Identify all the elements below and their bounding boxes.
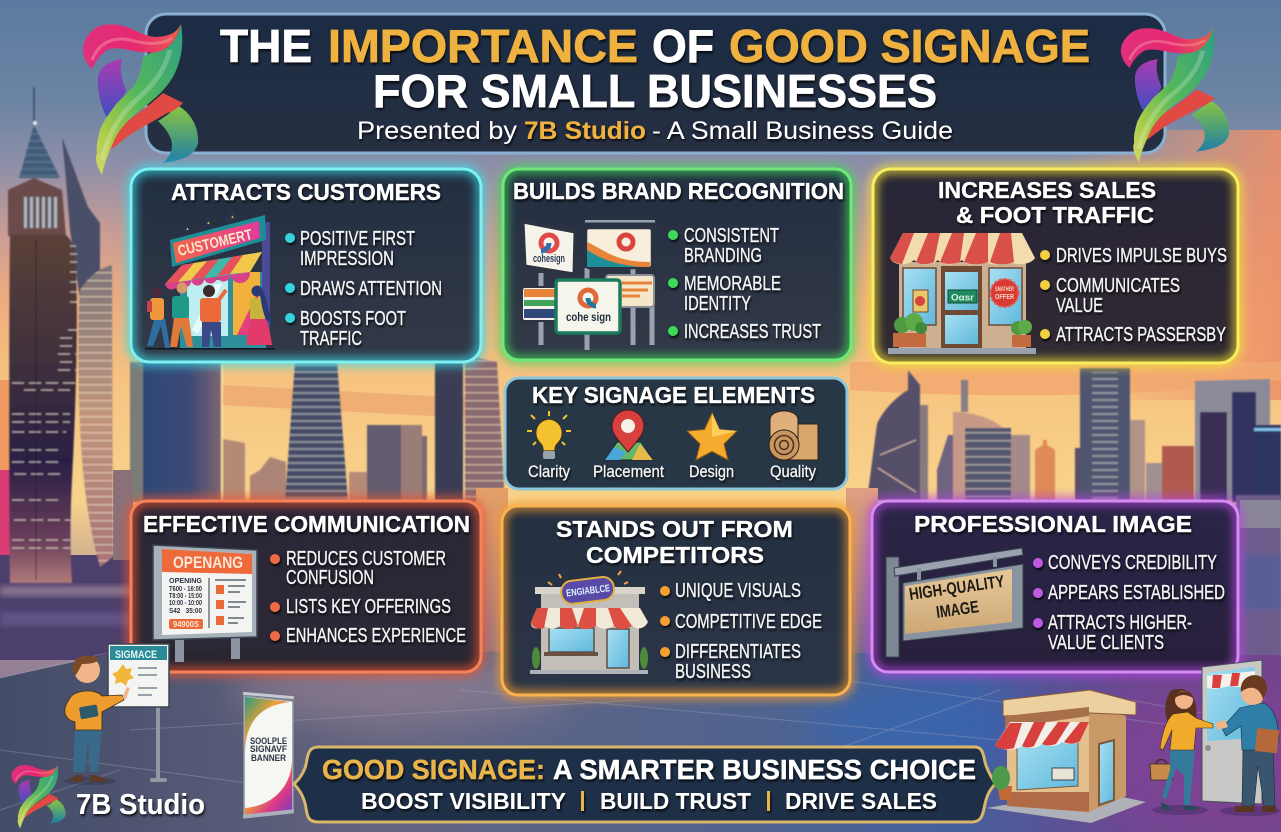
logo wordmark: 7B Studio xyxy=(76,789,205,821)
bullets: DRIVES IMPULSE BUYS xyxy=(1056,245,1227,267)
banner text: BANNER xyxy=(251,753,286,763)
heading: STANDS OUT FROM xyxy=(556,516,793,542)
bullets: IDENTITY xyxy=(684,293,751,315)
shopper 2 xyxy=(170,282,193,347)
sign text: T8:00 - 15:00 xyxy=(169,593,202,600)
bullets: IMPRESSION xyxy=(300,248,394,270)
sign text: SIGMACE xyxy=(115,649,157,661)
banner text xyxy=(250,736,287,763)
illustration: man presenting sign xyxy=(64,644,169,785)
title: IMPORTANCE xyxy=(328,20,638,72)
bullets: CONSISTENT xyxy=(684,225,779,247)
title: THE xyxy=(220,20,312,72)
sign text: HIGH-QUALITY xyxy=(908,572,1006,604)
callout heading: GOOD SIGNAGE: xyxy=(322,754,545,785)
icon: light bulb xyxy=(527,411,571,459)
bullets: ATTRACTS PASSERSBY xyxy=(1056,324,1226,346)
bullets xyxy=(1033,552,1225,654)
heading: ATTRACTS CUSTOMERS xyxy=(171,179,441,205)
shopper 1 xyxy=(147,287,170,348)
callout subline: BUILD TRUST xyxy=(600,788,751,814)
heading xyxy=(938,177,1156,228)
bullets: LISTS KEY OFFERINGS xyxy=(286,596,451,618)
header panel xyxy=(146,14,1165,153)
lower-left haze xyxy=(0,555,135,660)
icon labels: Clarity xyxy=(528,462,570,481)
lower-right haze xyxy=(1236,495,1281,660)
subtitle xyxy=(357,117,953,145)
bullets: CONFUSION xyxy=(286,567,374,589)
bullets: CONVEYS CREDIBILITY xyxy=(1048,552,1217,574)
title: FOR SMALL BUSINESSES xyxy=(373,65,937,117)
sign text: cohesign xyxy=(533,253,565,265)
bullets: APPEARS ESTABLISHED xyxy=(1048,582,1225,604)
woman xyxy=(1150,689,1213,810)
bullets xyxy=(660,580,822,683)
illustration: shop front xyxy=(888,233,1036,354)
right-mid skyline xyxy=(867,370,920,500)
sign text: OPENING xyxy=(169,578,203,585)
illustration: small shop building xyxy=(987,690,1146,823)
panel: attracts customers xyxy=(131,169,481,362)
bullets: MEMORABLE xyxy=(684,273,781,295)
panel: effective communication xyxy=(131,501,481,672)
icon labels: Placement xyxy=(593,462,664,481)
illustration: roll-up banner xyxy=(243,692,294,819)
callout: good signage banner xyxy=(294,747,995,822)
subtitle: 7B Studio xyxy=(524,117,646,145)
title: GOOD SIGNAGE xyxy=(729,20,1090,72)
panel: professional image xyxy=(872,501,1238,672)
bullets: VALUE CLIENTS xyxy=(1048,632,1164,654)
bullets: DRAWS ATTENTION xyxy=(300,278,442,300)
panel: builds brand recognition xyxy=(503,169,851,360)
bullets: REDUCES CUSTOMER xyxy=(286,548,446,570)
bullets: BRANDING xyxy=(684,245,762,267)
bullets: POSITIVE FIRST xyxy=(300,228,415,250)
icon: 7B logo left xyxy=(83,24,198,175)
callout subline: DRIVE SALES xyxy=(785,788,937,814)
shopper 3 xyxy=(200,285,226,347)
sign text: 10:00 - 10:00 xyxy=(169,600,202,607)
illustration: storefront with shoppers xyxy=(145,212,275,350)
illustration: standout shop xyxy=(530,571,648,674)
sign text: Oαsr xyxy=(951,292,974,304)
sign text: ENGIABLCE xyxy=(566,583,611,600)
man xyxy=(1215,675,1279,812)
title xyxy=(220,20,1090,117)
shopper 4 xyxy=(247,286,272,345)
sign text: 94900S xyxy=(173,620,200,629)
icon labels: Quality xyxy=(770,462,816,481)
bullets: DIFFERENTIATES xyxy=(675,641,801,663)
bullets: INCREASES TRUST xyxy=(684,321,821,343)
icon labels: Design xyxy=(689,462,734,481)
illustration: branded signs xyxy=(522,220,655,350)
logo: 7B Studio xyxy=(11,765,205,828)
bullets: BOOSTS FOOT xyxy=(300,308,406,330)
callout heading xyxy=(322,754,976,785)
illustration: information board xyxy=(153,545,257,662)
sign text: CUSTOMERT xyxy=(176,226,254,260)
callout subline: BOOST VISIBILITY xyxy=(361,788,566,814)
icon: map pin xyxy=(605,410,653,460)
sign text: IMAGE xyxy=(935,597,980,622)
heading: COMPETITORS xyxy=(586,542,764,568)
bullets: COMPETITIVE EDGE xyxy=(675,611,822,633)
heading: BUILDS BRAND RECOGNITION xyxy=(513,178,844,204)
subtitle: Presented by xyxy=(357,117,518,145)
bullets: ATTRACTS HIGHER- xyxy=(1048,612,1192,634)
bullets: COMMUNICATES xyxy=(1056,275,1180,297)
bullets xyxy=(285,228,442,350)
callout heading: A SMARTER BUSINESS CHOICE xyxy=(553,754,976,785)
bullets: VALUE xyxy=(1056,295,1103,317)
icon: star xyxy=(687,413,737,460)
bullets xyxy=(1040,245,1227,346)
bullets: ENHANCES EXPERIENCE xyxy=(286,625,466,647)
panel: key signage elements xyxy=(505,378,847,489)
sign text: OPENANG xyxy=(173,553,243,572)
subtitle: - A Small Business Guide xyxy=(652,117,953,145)
panel: stands out from competitors xyxy=(502,506,850,695)
sign text xyxy=(908,572,1006,622)
gaps between lower cards xyxy=(476,488,508,713)
heading: PROFESSIONAL IMAGE xyxy=(914,511,1192,537)
icon labels xyxy=(528,462,816,481)
banner text: SOOLPLE xyxy=(250,736,287,746)
heading: KEY SIGNAGE ELEMENTS xyxy=(532,382,815,408)
heading: & FOOT TRAFFIC xyxy=(956,202,1154,228)
bullets: BUSINESS xyxy=(675,661,751,683)
door xyxy=(1202,660,1262,804)
bullets: UNIQUE VISUALS xyxy=(675,580,801,602)
title: OF xyxy=(652,20,714,72)
bullets xyxy=(270,548,466,647)
sign text: S42 35:00 xyxy=(169,608,202,615)
callout subline xyxy=(361,788,937,814)
illustration: hanging wooden sign xyxy=(886,548,1023,657)
bullets xyxy=(668,225,821,343)
heading: INCREASES SALES xyxy=(938,177,1156,203)
icon: 7B logo right xyxy=(1121,28,1229,162)
bullets: TRAFFIC xyxy=(300,328,362,350)
left towers xyxy=(8,87,113,583)
panel: increases sales and foot traffic xyxy=(873,169,1238,363)
sign text: SMATHER xyxy=(995,286,1014,293)
banner text: SIGNAVF xyxy=(250,744,287,754)
heading: EFFECTIVE COMMUNICATION xyxy=(143,511,470,537)
sign text: T600 - 16:00 xyxy=(169,586,202,593)
sign text xyxy=(169,578,203,615)
sign text: cohe sign xyxy=(566,312,611,324)
icon: material roll xyxy=(769,411,818,460)
illustration: shopkeeper greeting customer xyxy=(1150,660,1280,816)
heading xyxy=(556,516,793,568)
floor xyxy=(0,650,1281,832)
sign text: OFFER xyxy=(995,294,1014,301)
left-mid skyline xyxy=(130,362,144,502)
